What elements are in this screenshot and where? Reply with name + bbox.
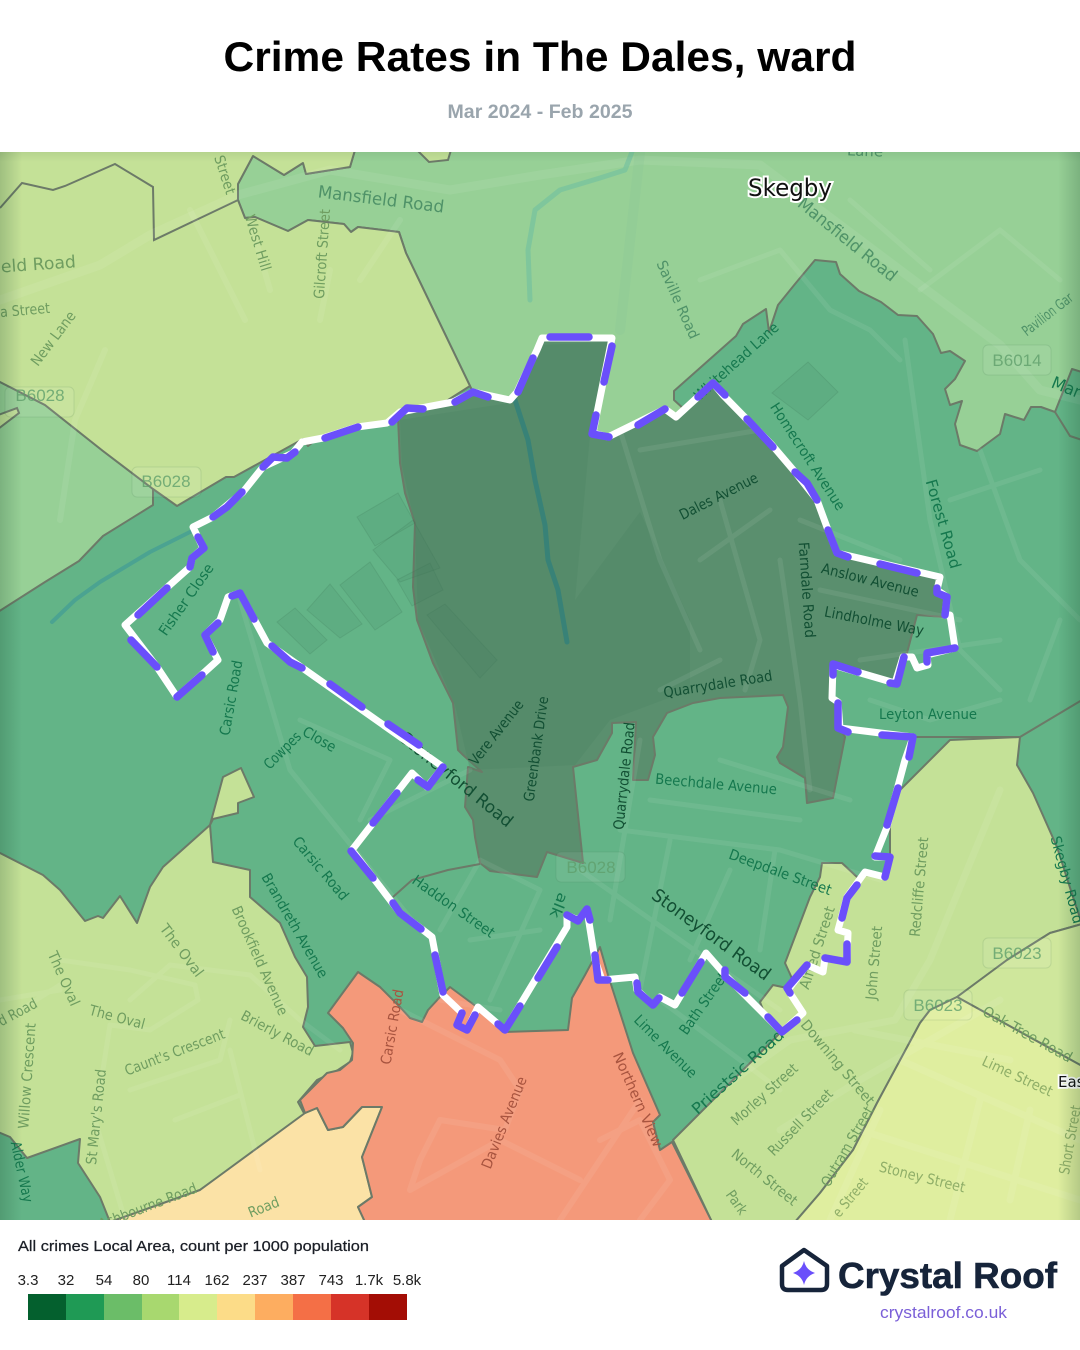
region: light green west [0, 381, 153, 612]
street labels: Haddon Street [409, 873, 498, 942]
region: lime north west [0, 150, 470, 506]
street labels: Whitehead Lane [692, 320, 783, 404]
region: peach south [110, 1107, 382, 1222]
road shield labels: B6028 [566, 858, 616, 877]
region: dark green the dales core [398, 338, 947, 877]
legend values: 3.3 [18, 1272, 38, 1289]
road shields [5, 345, 1051, 1020]
street labels: Dales Avenue [677, 470, 761, 524]
darker tone patches [412, 514, 480, 770]
street labels: Lindholme Way [823, 605, 925, 640]
logo wordmark: Crystal Roof [838, 1255, 1058, 1296]
region: lime south west [0, 825, 353, 1222]
region: salmon high crime [300, 947, 712, 1222]
street labels: Morley Street [728, 1061, 802, 1129]
street labels: Mansfield Road [793, 194, 901, 286]
legend values: 54 [96, 1272, 112, 1289]
icon: house with star [782, 1250, 827, 1290]
street labels: New Lane [28, 309, 80, 369]
legend values [18, 1272, 422, 1289]
region: light green north [238, 150, 1080, 451]
street labels: Vere Avenue [467, 697, 527, 769]
road shield labels: B6014 [992, 351, 1042, 370]
street labels: Willow Crescent [16, 1022, 40, 1129]
region: lime south east [673, 737, 1080, 1222]
street labels: Brandreth Avenue [258, 871, 330, 981]
legend values: 32 [58, 1272, 74, 1289]
website: crystalroof.co.uk [880, 1304, 1008, 1322]
ward boundary: The Dales [125, 337, 955, 1032]
street labels: North Street [728, 1147, 800, 1210]
street labels: Stoneyford Road [395, 728, 517, 832]
street labels: Stoneyford Road [647, 885, 775, 985]
street labels: The Oval [155, 921, 206, 981]
legend values: 743 [318, 1272, 344, 1289]
street labels: Ashbourne Road [97, 1181, 199, 1233]
street labels: Stoney Street [877, 1160, 967, 1196]
street labels: Beechdale Avenue [655, 772, 778, 798]
street labels: Mansfield Road [317, 182, 445, 218]
road shield labels: B6023 [992, 944, 1042, 963]
street labels: Russell Street [765, 1086, 837, 1159]
region: small lime patch [210, 768, 254, 825]
street labels: The Oval [87, 1003, 147, 1033]
street labels: Carsic Road [289, 834, 351, 904]
street labels: Saville Road [653, 258, 701, 342]
street labels: Caunt's Crescent [123, 1026, 228, 1079]
street labels: Anslow Avenue [820, 561, 921, 601]
street labels: Park [722, 1188, 750, 1219]
street labels: Close [299, 724, 339, 756]
street labels: Deepdale Street [727, 847, 834, 899]
road shield labels [15, 351, 1042, 1015]
street labels: Alder Way [7, 1140, 35, 1204]
street labels: Road [246, 1195, 282, 1221]
legend values: 1.7k [355, 1272, 384, 1289]
map edge vignette [0, 152, 1080, 1220]
road shield labels: B6028 [141, 472, 191, 491]
street labels: e Street [830, 1175, 872, 1221]
street labels: Gilcroft Street [312, 208, 334, 299]
street labels: St Mary's Road [84, 1068, 110, 1166]
street labels: Lime Avenue [630, 1012, 700, 1082]
street labels: West Hill [241, 213, 273, 273]
street labels: Street [210, 154, 238, 197]
street labels: Alfred Street [797, 904, 839, 991]
street labels: alk [545, 890, 570, 921]
legend [18, 1238, 422, 1320]
title: Crime Rates in The Dales, ward [224, 33, 856, 80]
boundary purple dashes [131, 337, 955, 1032]
road shield labels: B6028 [15, 386, 65, 405]
street labels: Davies Avenue [479, 1075, 531, 1171]
legend title: All crimes Local Area, count per 1000 population [18, 1238, 369, 1255]
legend values: 387 [280, 1272, 306, 1289]
region: lime north of oak tree road [957, 924, 1080, 1066]
legend values: 5.8k [393, 1272, 422, 1289]
street labels: Homecroft Avenue [766, 400, 848, 514]
building footprints [277, 362, 838, 678]
place label: Skegby: Skegby [748, 174, 832, 202]
legend values: 237 [242, 1272, 268, 1289]
street labels: Greenbank Drive [522, 695, 552, 803]
legend values: 80 [133, 1272, 149, 1289]
street labels: Quarrydale Road [611, 721, 639, 831]
internal ward lines north west [0, 150, 451, 429]
street labels: Fisher Close [156, 561, 218, 639]
street labels: Brookfield Avenue [228, 904, 290, 1018]
subtitle: date range: Mar 2024 - Feb 2025 [448, 102, 633, 123]
street labels: a Street [0, 301, 51, 321]
street labels: Forest Road [922, 477, 964, 571]
street labels: Leyton Avenue [879, 707, 977, 723]
street labels: Bath Street [677, 970, 731, 1038]
boundary white line [125, 338, 955, 1032]
logo: Crystal Roof [782, 1250, 1058, 1322]
region: pale yellow green east [795, 997, 1080, 1222]
legend values: 114 [167, 1272, 191, 1289]
street labels: Downing Street [797, 1017, 877, 1109]
street labels: Quarrydale Road [662, 668, 774, 702]
road network [0, 160, 1080, 1220]
street labels: Carsic Road [218, 659, 246, 737]
street labels: Carsic Road [379, 988, 407, 1066]
street labels: Lime Street [979, 1054, 1055, 1100]
street labels: Priestsic Road [688, 1026, 788, 1118]
legend colour scale [28, 1294, 407, 1320]
streams [52, 152, 640, 642]
street labels: Oak Tree Road [979, 1004, 1075, 1066]
ward internal lines [393, 412, 1080, 897]
street labels: Northern View [609, 1050, 665, 1150]
street labels: Redcliffe Street [908, 836, 932, 938]
street labels: Farndale Road [795, 542, 817, 638]
legend values: 162 [204, 1272, 230, 1289]
street labels: The Oval [44, 948, 82, 1009]
street labels: Brierly Road [238, 1008, 316, 1060]
street labels: Lane [847, 143, 883, 161]
road shield labels: B6023 [913, 996, 963, 1015]
street labels: John Street [864, 925, 886, 1001]
street labels: Outram Street [819, 1104, 878, 1190]
street labels: Cowpes [261, 729, 305, 773]
